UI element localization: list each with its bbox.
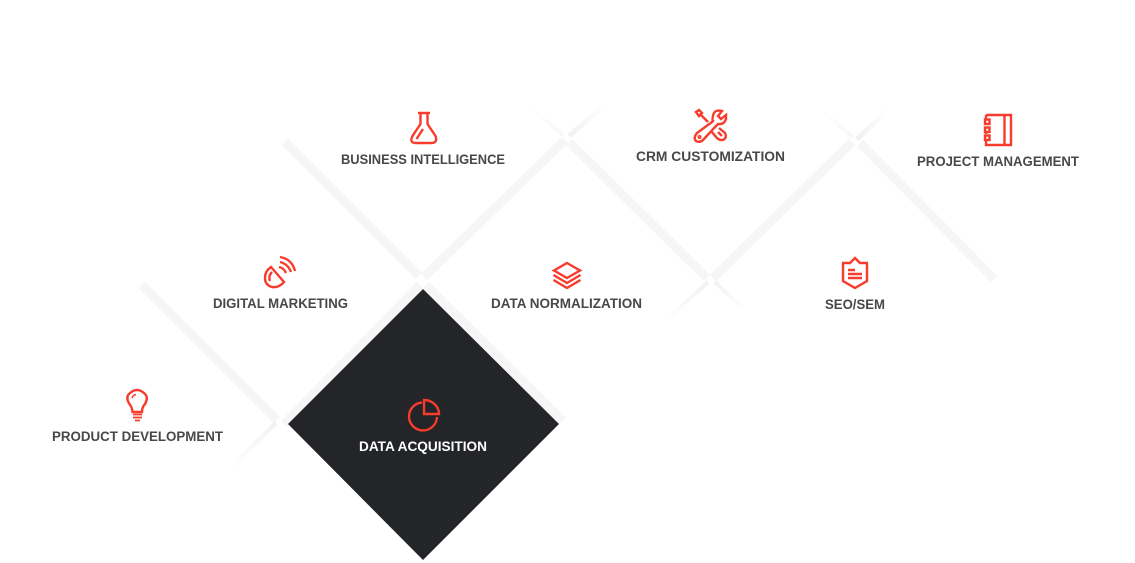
icon: shield bbox=[842, 258, 868, 288]
label: crm customization: CRM CUSTOMIZATION bbox=[636, 149, 785, 164]
icon: layers bbox=[554, 263, 580, 288]
dark diamond: data acquisition bbox=[288, 289, 559, 560]
label: digital marketing: DIGITAL MARKETING bbox=[213, 296, 348, 311]
label: data acquisition: DATA ACQUISITION bbox=[359, 439, 487, 454]
icon: light bulb bbox=[127, 390, 147, 420]
label: seo/sem: SEO/SEM bbox=[825, 297, 885, 312]
label: project management: PROJECT MANAGEMENT bbox=[917, 154, 1080, 169]
icon: satellite dish bbox=[265, 257, 295, 287]
label: product development: PRODUCT DEVELOPMENT bbox=[52, 429, 224, 444]
background lattice lines bbox=[142, 105, 994, 468]
icon: pie chart bbox=[409, 400, 439, 430]
icon: notebook bbox=[985, 115, 1011, 145]
icon: flask bbox=[411, 113, 436, 143]
label: business intelligence: BUSINESS INTELLIGENCE bbox=[341, 152, 505, 167]
label: data normalization: DATA NORMALIZATION bbox=[491, 296, 642, 311]
icon: crossed tools bbox=[695, 110, 726, 142]
